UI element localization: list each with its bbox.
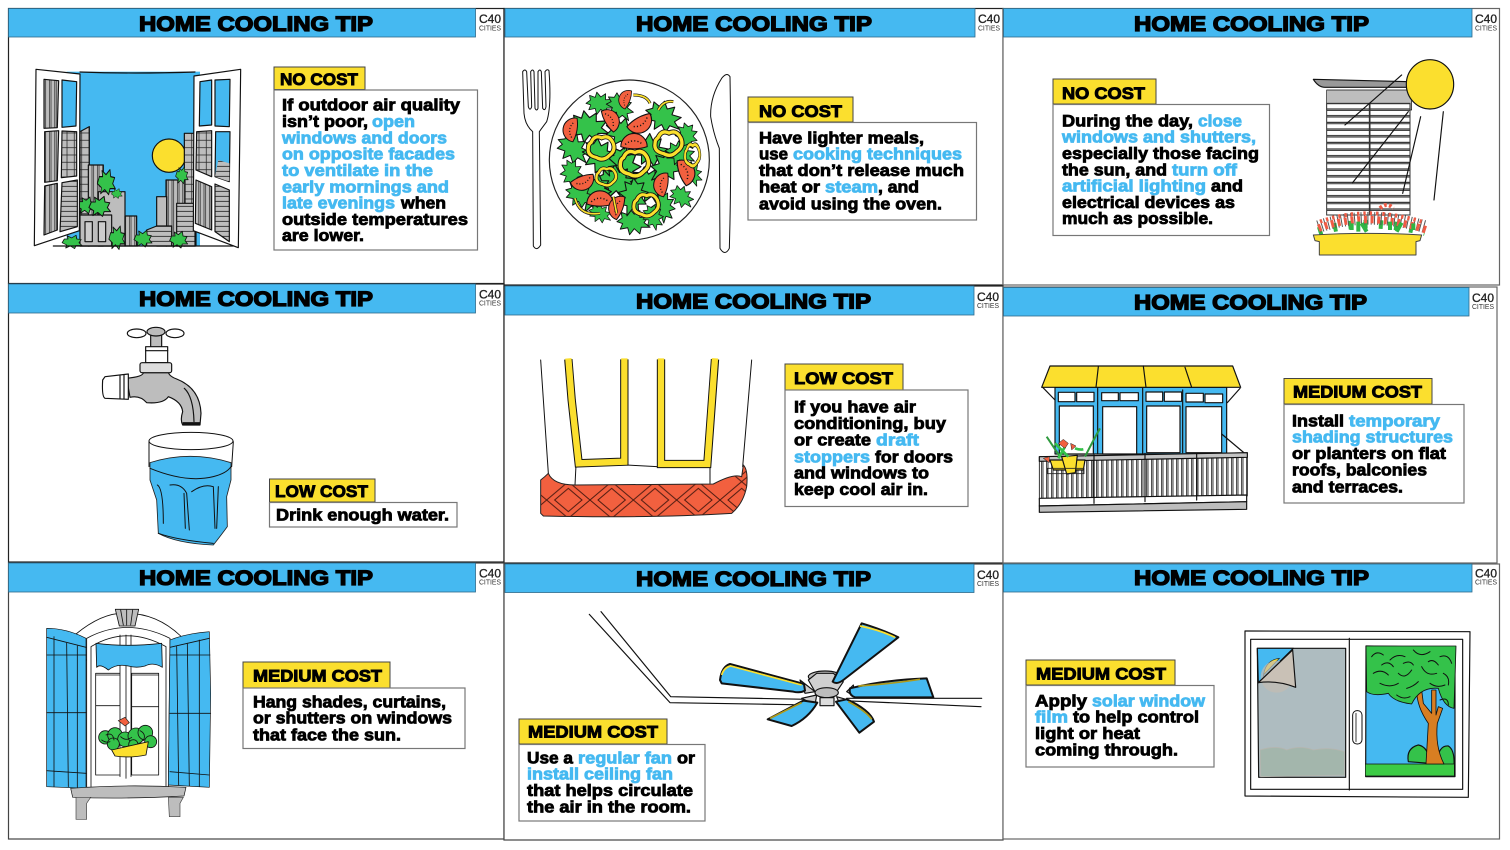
header bar: HOME COOLING TIP [1134, 291, 1367, 314]
tip text: artificial lighting [1062, 177, 1206, 196]
logo: C40 Cities: C40 [978, 12, 1000, 26]
tip text: or shutters on windows [253, 709, 452, 728]
tip text: solar window [1092, 691, 1206, 710]
logo: C40 Cities [1472, 291, 1494, 311]
tip text: that helps circulate [527, 781, 693, 800]
logo: C40 Cities: CITIES [977, 579, 999, 588]
header bar [1004, 564, 1472, 592]
cost label: NO COST [1062, 84, 1146, 103]
header bar [505, 286, 974, 315]
tip text: avoid using the oven. [759, 194, 942, 213]
tip text: isn’t poor, [282, 112, 368, 131]
tip text [243, 688, 465, 748]
tip text: much as possible. [1062, 209, 1213, 228]
cost label [1053, 79, 1156, 104]
tip text: install ceiling fan [527, 765, 673, 784]
icon: window with blue shutters [47, 609, 211, 819]
tip text: or create [794, 431, 871, 450]
cost label: MEDIUM COST [528, 722, 659, 741]
logo: C40 Cities: C40 [1475, 566, 1497, 580]
tip text: coming through. [1035, 740, 1178, 759]
header bar [8, 563, 476, 592]
header bar [1004, 288, 1469, 316]
icon: door with draft stopper [541, 358, 752, 517]
tip text: roofs, balconies [1292, 460, 1427, 479]
tip text [519, 744, 705, 821]
tip text: conditioning, buy [794, 414, 947, 433]
logo: C40 Cities [977, 568, 999, 588]
tip text: that don’t release much [759, 161, 964, 180]
cost label: NO COST [759, 102, 843, 121]
header bar: HOME COOLING TIP [1134, 13, 1369, 36]
cost label [1026, 660, 1175, 685]
logo: C40 Cities: C40 [1472, 291, 1494, 305]
logo: C40 Cities: CITIES [479, 24, 501, 32]
icon: tap and glass of water [102, 327, 233, 545]
logo: C40 Cities [479, 12, 501, 32]
tip text: regular fan [578, 748, 672, 767]
header bar: HOME COOLING TIP [139, 567, 373, 590]
tip text: steam [825, 177, 878, 196]
cost label [1284, 378, 1432, 404]
tip text: If you have air [794, 397, 916, 416]
header bar: HOME COOLING TIP [139, 13, 373, 36]
tip text [748, 122, 976, 220]
tip text: shading structures [1292, 428, 1453, 447]
panel: open windows [8, 8, 504, 284]
cost label [748, 97, 853, 122]
tip text [785, 390, 968, 506]
header bar: HOME COOLING TIP [636, 290, 871, 313]
logo: C40 Cities: C40 [479, 566, 501, 580]
panel: drink water [8, 284, 504, 562]
tip text: late evenings [282, 194, 395, 213]
cost label: LOW COST [275, 482, 369, 501]
logo: C40 Cities: C40 [479, 12, 501, 26]
logo: C40 Cities [978, 12, 1000, 32]
cost label: MEDIUM COST [1036, 664, 1167, 683]
cost label [243, 662, 390, 688]
logo: C40 Cities: CITIES [977, 301, 999, 310]
icon: open window over city [34, 69, 241, 249]
tip text: early mornings and [282, 177, 449, 196]
icon: shuttered window with sun and flower box [1313, 60, 1454, 255]
header bar: HOME COOLING TIP [139, 288, 373, 311]
header bar: HOME COOLING TIP [636, 568, 871, 591]
header bar: HOME COOLING TIP [1134, 567, 1369, 590]
icon: window with solar film and tree [1245, 631, 1470, 797]
tip text: Have lighter meals, [759, 128, 924, 147]
header bar [8, 284, 476, 313]
logo: C40 Cities: CITIES [1475, 24, 1497, 32]
tip text: Install [1292, 411, 1344, 430]
tip text: During the day, [1062, 111, 1193, 130]
tip text: or planters on flat [1292, 444, 1446, 463]
panel: shading structures [1003, 287, 1497, 563]
icon: plate of salad with fork and knife [523, 70, 731, 252]
tip text: close [1198, 111, 1242, 130]
cost label: NO COST [280, 70, 359, 89]
logo: C40 Cities: CITIES [978, 24, 1000, 32]
panel: solar window film [1003, 564, 1500, 839]
tip text: to ventilate in the [282, 161, 433, 180]
tip text: film [1035, 708, 1068, 727]
logo: C40 Cities: C40 [977, 568, 999, 582]
icon: ceiling fan [589, 612, 982, 733]
tip text: heat or [759, 177, 820, 196]
tip text: Drink enough water. [276, 505, 449, 524]
logo: C40 Cities [479, 288, 501, 308]
tip text [1026, 686, 1214, 767]
panel: ceiling fan [504, 564, 1003, 840]
cost label: MEDIUM COST [1293, 382, 1423, 401]
tip text: for doors [875, 447, 953, 466]
logo: C40 Cities: CITIES [479, 578, 501, 586]
tip text: light or heat [1035, 724, 1140, 743]
header bar: HOME COOLING TIP [636, 13, 872, 36]
icon: balcony with awning [1039, 366, 1247, 512]
tip text: windows and doors [281, 128, 447, 147]
logo: C40 Cities: CITIES [1472, 302, 1494, 311]
panel: lighter meals [504, 8, 1003, 285]
logo: C40 Cities: CITIES [479, 298, 501, 308]
tip text: the sun, and [1062, 160, 1167, 179]
cost label [785, 364, 903, 390]
tip text: and windows to [794, 464, 929, 483]
header bar [1004, 8, 1472, 37]
tip text: when [400, 194, 446, 213]
header bar [505, 564, 974, 592]
tip text: draft [876, 431, 919, 450]
tip text: or [677, 748, 695, 767]
tip text: on opposite facades [282, 145, 455, 164]
tip text: turn off [1172, 160, 1237, 179]
tip text: and [1211, 177, 1243, 196]
logo: C40 Cities [1475, 12, 1497, 32]
tip text: especially those facing [1062, 144, 1259, 163]
logo: C40 Cities: C40 [977, 290, 999, 304]
panel: draft stoppers [504, 286, 1003, 563]
tip text: , and [878, 177, 919, 196]
tip text: If outdoor air quality [282, 96, 461, 114]
logo: C40 Cities [977, 290, 999, 310]
header bar [8, 8, 476, 37]
cost label [519, 719, 667, 744]
tip text: electrical devices as [1062, 193, 1235, 212]
tip text [1053, 104, 1270, 236]
tip text: and terraces. [1292, 477, 1403, 496]
tip text: temporary [1349, 411, 1441, 430]
tip text: Apply [1035, 691, 1088, 710]
tip text: stoppers [794, 447, 870, 466]
tip text: open [372, 112, 415, 131]
tip text: cooking techniques [793, 145, 962, 164]
tip text: the air in the room. [527, 797, 691, 816]
tip text: to help control [1073, 708, 1199, 727]
cost label: LOW COST [794, 369, 894, 388]
tip text: Hang shades, curtains, [253, 692, 446, 711]
logo: C40 Cities [1475, 566, 1497, 586]
tip text: outside temperatures [282, 210, 468, 229]
panel: shades and shutters [8, 563, 504, 839]
logo: C40 Cities: CITIES [1475, 578, 1497, 586]
tip text [274, 90, 478, 250]
cost label: MEDIUM COST [253, 667, 383, 686]
tip text: keep cool air in. [794, 480, 928, 499]
logo: C40 Cities: C40 [479, 288, 501, 302]
tip text: windows and shutters, [1061, 128, 1256, 147]
logo: C40 Cities [479, 566, 501, 586]
tip text: that face the sun. [253, 725, 401, 744]
logo: C40 Cities: C40 [1475, 12, 1497, 26]
panel: close shutters [1003, 8, 1500, 285]
tip text [270, 502, 457, 527]
header bar [505, 8, 975, 37]
tip text: use [759, 145, 788, 164]
tip text [1284, 404, 1464, 503]
tip text: are lower. [282, 226, 364, 245]
tip text: Use a [527, 748, 574, 767]
